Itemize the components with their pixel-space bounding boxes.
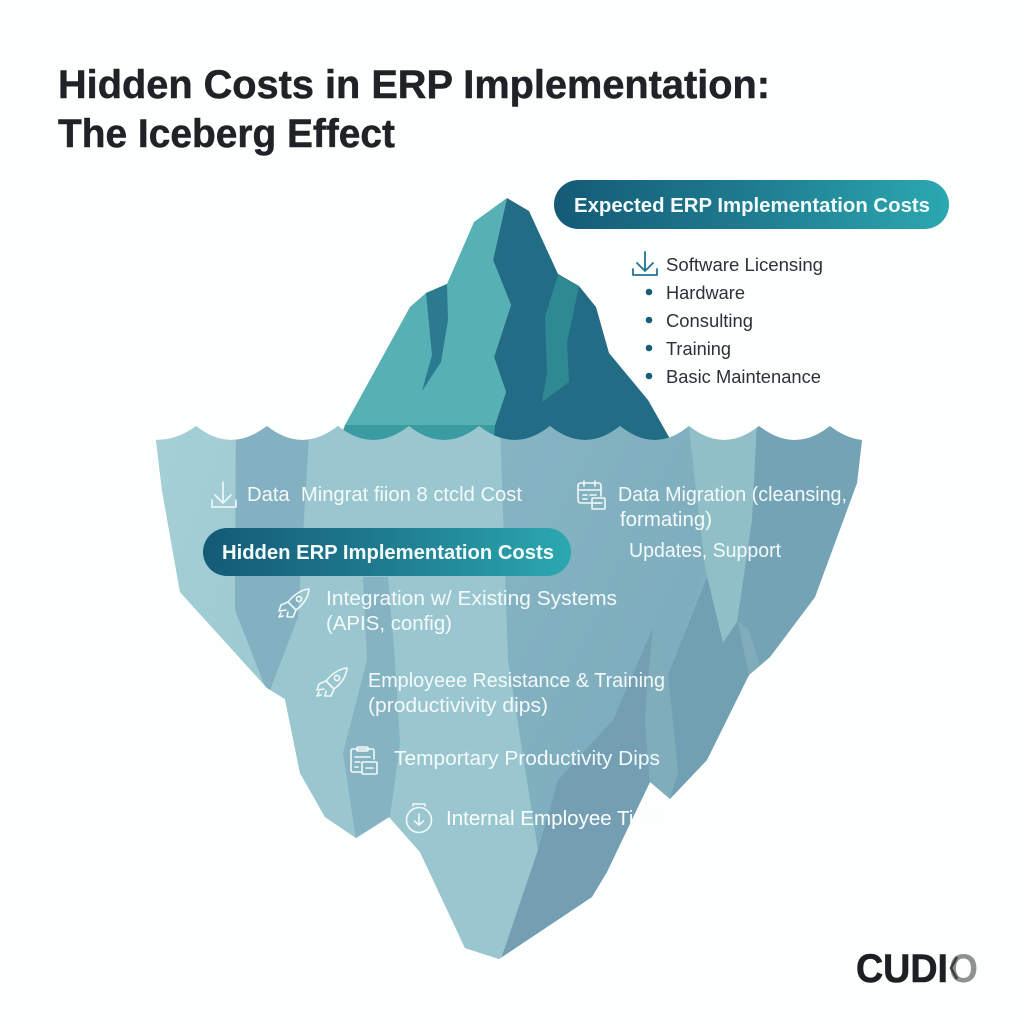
title: The Iceberg Effect bbox=[58, 112, 395, 156]
expected costs list: Training bbox=[666, 339, 731, 359]
icon: rocket bbox=[317, 668, 347, 696]
hidden item: integration: (APIS, config) bbox=[326, 613, 452, 635]
hidden item: data migration: Updates, Support bbox=[629, 540, 781, 562]
pill: hidden costs: Hidden ERP Implementation Costs bbox=[222, 542, 554, 564]
hidden item: productivity dips: Temportary Productivity Dips bbox=[394, 748, 660, 770]
expected costs list: Basic Maintenance bbox=[666, 367, 821, 387]
iceberg body below water bbox=[150, 420, 870, 965]
expected costs list bbox=[633, 252, 823, 387]
icon: download bbox=[212, 482, 236, 507]
hidden item: employee resistance: Employeee Resistance & Training bbox=[368, 670, 665, 692]
hidden item: internal employee time bbox=[406, 804, 662, 832]
title bbox=[58, 63, 770, 156]
hidden item: data cost: Data Mingrat fiion 8 ctcld Cost bbox=[247, 484, 522, 506]
logo: O bbox=[949, 947, 978, 991]
hidden item: internal employee time: Internal Employee Time bbox=[446, 808, 662, 830]
expected costs list: Software Licensing bbox=[666, 255, 823, 275]
hidden item: data migration: formating) bbox=[620, 509, 712, 531]
pill: expected costs bbox=[554, 180, 949, 229]
hidden item: data migration bbox=[578, 481, 847, 562]
hidden item: employee resistance: (productivivity dips) bbox=[368, 695, 548, 717]
iceberg tip above water bbox=[338, 198, 669, 445]
icon: clipboard bbox=[351, 747, 377, 774]
hidden item: integration: Integration w/ Existing Systems bbox=[326, 588, 617, 610]
icon: timer bbox=[406, 804, 432, 832]
expected costs list: Hardware bbox=[666, 283, 745, 303]
hidden item: integration bbox=[279, 588, 617, 635]
hidden item: productivity dips bbox=[351, 747, 660, 774]
hidden item: data migration: Data Migration (cleansing, bbox=[618, 484, 847, 506]
icon: rocket bbox=[279, 589, 309, 617]
icon: calendar bbox=[578, 481, 605, 509]
hidden item: employee resistance bbox=[317, 668, 665, 717]
pill: expected costs: Expected ERP Implementation Costs bbox=[574, 195, 930, 217]
pill: hidden costs bbox=[203, 528, 571, 576]
title: Hidden Costs in ERP Implementation: bbox=[58, 63, 770, 107]
icon: download bbox=[633, 252, 657, 275]
expected costs list: Consulting bbox=[666, 311, 753, 331]
logo: CUDI bbox=[856, 947, 948, 991]
